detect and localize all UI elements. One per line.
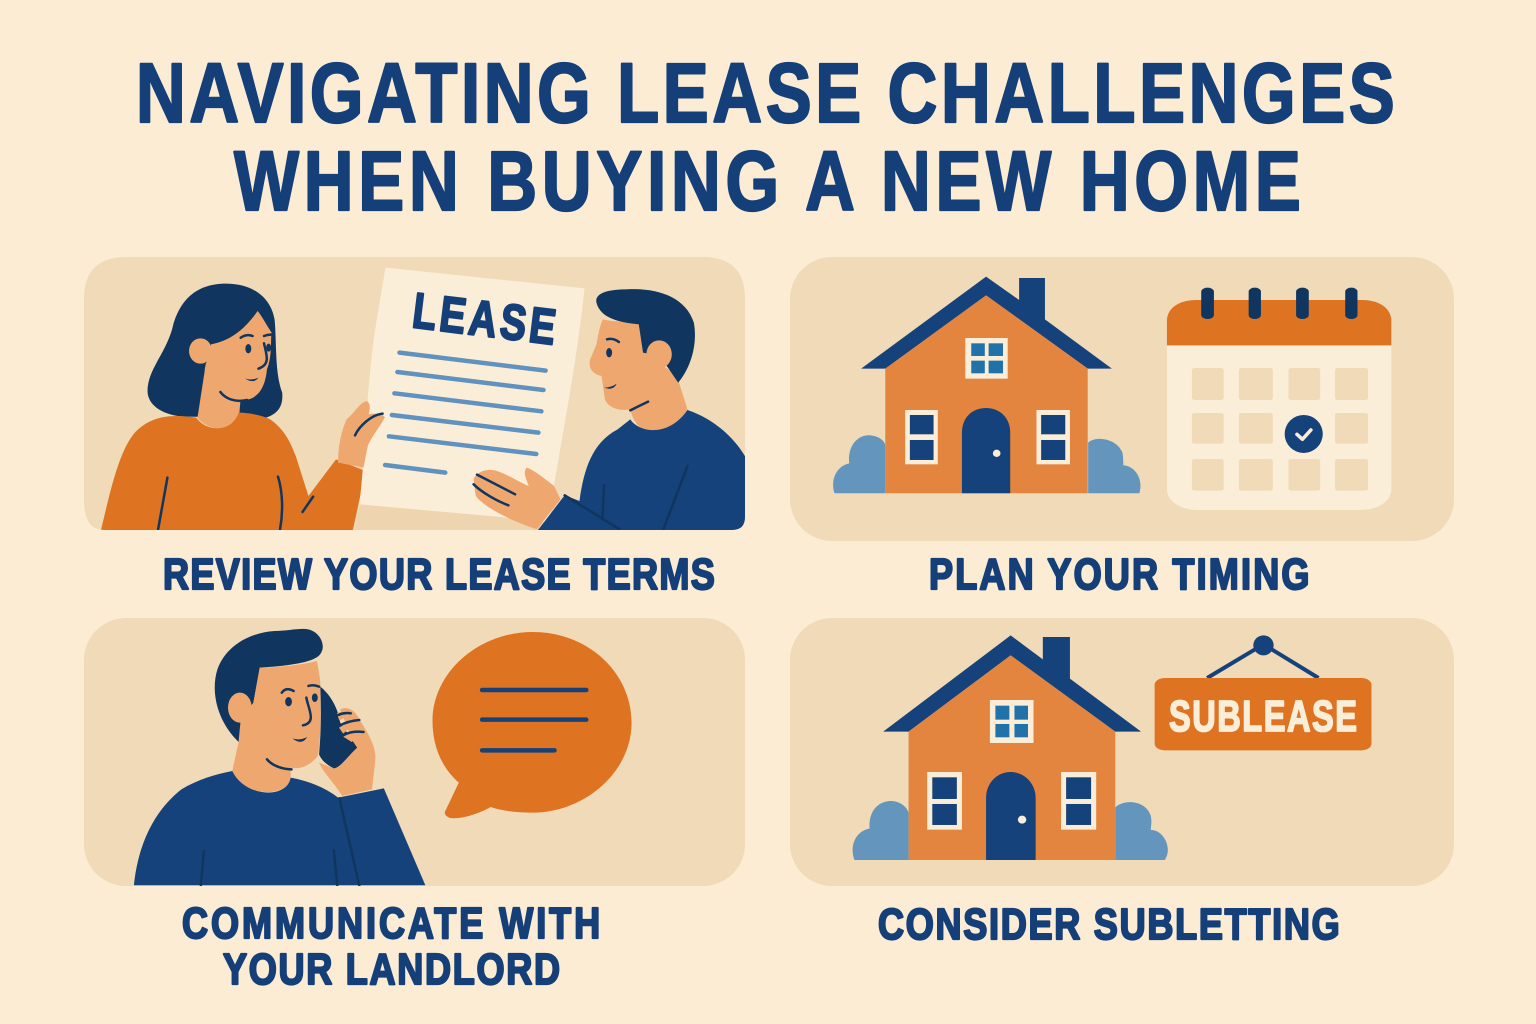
caption: review your lease terms: REVIEW YOUR LEASE TERMS (163, 550, 715, 599)
lease heading on document: LEASE (410, 282, 559, 356)
man (474, 289, 747, 530)
title: NAVIGATING LEASE CHALLENGES (136, 47, 1395, 141)
panel: review your lease terms (84, 257, 747, 530)
woman's hand (338, 401, 385, 468)
caption: consider subletting: CONSIDER SUBLETTING (878, 900, 1340, 949)
icon: calendar (1167, 288, 1391, 510)
panel: communicate with your landlord (84, 618, 745, 886)
caption: plan your timing: PLAN YOUR TIMING (929, 550, 1309, 599)
title: WHEN BUYING A NEW HOME (234, 135, 1301, 229)
sublease sign text: SUBLEASE (1169, 692, 1357, 741)
panel background (84, 257, 745, 530)
illustration group (833, 277, 1391, 510)
lease document (359, 268, 585, 523)
paper shadow (356, 518, 539, 528)
illustration group (134, 629, 632, 885)
panel background (84, 618, 745, 886)
speech bubble (433, 632, 632, 818)
panel: plan your timing (790, 257, 1454, 541)
man on phone (134, 629, 425, 885)
caption: communicate with your landlord (182, 899, 600, 994)
panel background (790, 257, 1454, 541)
panel: consider subletting (790, 618, 1454, 886)
panel background (790, 618, 1454, 886)
icon: house (853, 635, 1168, 860)
woman (101, 284, 366, 530)
title (136, 47, 1395, 229)
illustration: two people with lease (101, 268, 747, 530)
illustration group (853, 635, 1371, 860)
caption: communicate with your landlord: COMMUNICATE WITH (182, 899, 600, 948)
icon: house (833, 277, 1140, 493)
caption: communicate with your landlord: YOUR LANDLORD (223, 945, 560, 994)
hanging sign board (1155, 635, 1371, 750)
